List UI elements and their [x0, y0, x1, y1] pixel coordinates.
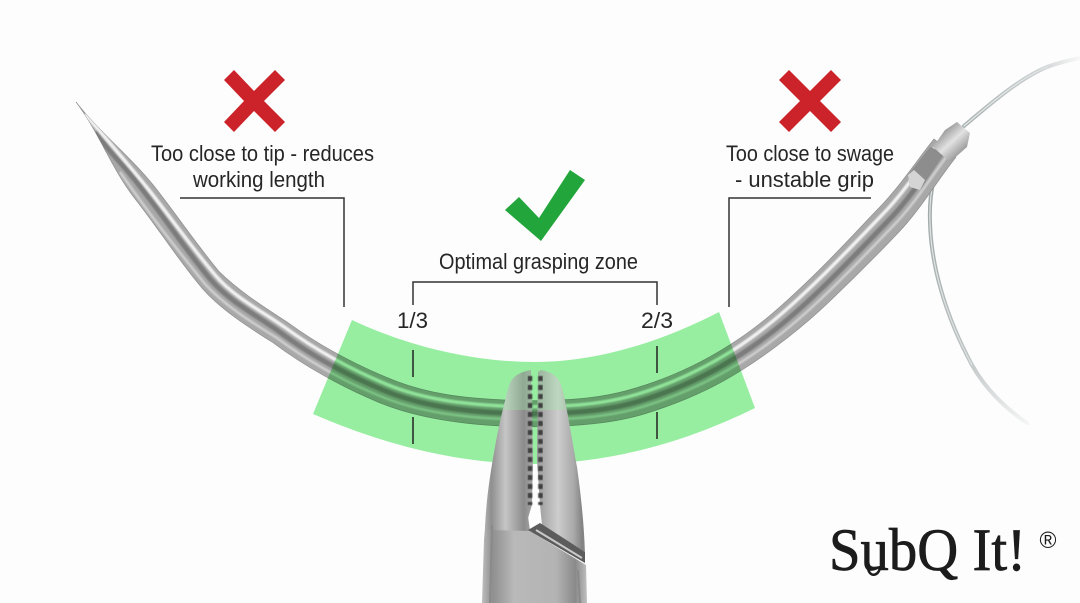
- label: two thirds: 2/3: [641, 308, 673, 333]
- serrated teeth: [530, 376, 540, 505]
- swage slot: [908, 147, 945, 190]
- icon: red cross right: [779, 70, 841, 132]
- jaw joint slot: [528, 523, 585, 563]
- icon: green check: [505, 170, 585, 241]
- green optimal zone band: [313, 312, 755, 464]
- text: too close to tip: [151, 141, 374, 192]
- logo: SubQ It!: SubQ It!: [829, 517, 1026, 583]
- swage collar: [933, 122, 970, 162]
- tick marks: one third: [412, 350, 414, 444]
- text: too close to swage: Too close to swage: [726, 141, 894, 166]
- green tint on jaw tips: [503, 370, 566, 410]
- logo needle hook on u: [868, 568, 880, 575]
- text: optimal grasping zone: Optimal grasping zone: [439, 249, 638, 274]
- needle body: [76, 102, 956, 427]
- curved suture needle: [76, 102, 970, 427]
- registered mark: ®: [1040, 527, 1056, 553]
- right jaw: [537, 370, 585, 552]
- callout leader: swage: [729, 198, 871, 307]
- tick marks: two thirds: [656, 346, 658, 439]
- needle second highlight: [120, 152, 950, 420]
- needle highlight: [85, 114, 939, 407]
- needle stripes: [85, 114, 950, 420]
- label: one third: 1/3: [397, 308, 428, 333]
- suture thread: [930, 58, 1080, 423]
- callout leader: tip: [180, 198, 344, 307]
- lower shaft: [482, 515, 587, 603]
- forceps / needle holder: [482, 370, 587, 603]
- icon: red cross left: [224, 70, 285, 132]
- text: too close to swage: [726, 141, 894, 192]
- shaft groove: [490, 525, 580, 603]
- left jaw: [485, 370, 533, 531]
- text: too close to tip: Too close to tip - reduces: [151, 141, 374, 166]
- needle dark groove: [95, 132, 945, 414]
- joint highlight: [536, 530, 582, 558]
- bracket: optimal zone: [413, 282, 657, 305]
- swage slot end: [908, 170, 925, 190]
- text: too close to swage: - unstable grip: [735, 167, 874, 192]
- text: too close to tip: working length: [192, 167, 325, 192]
